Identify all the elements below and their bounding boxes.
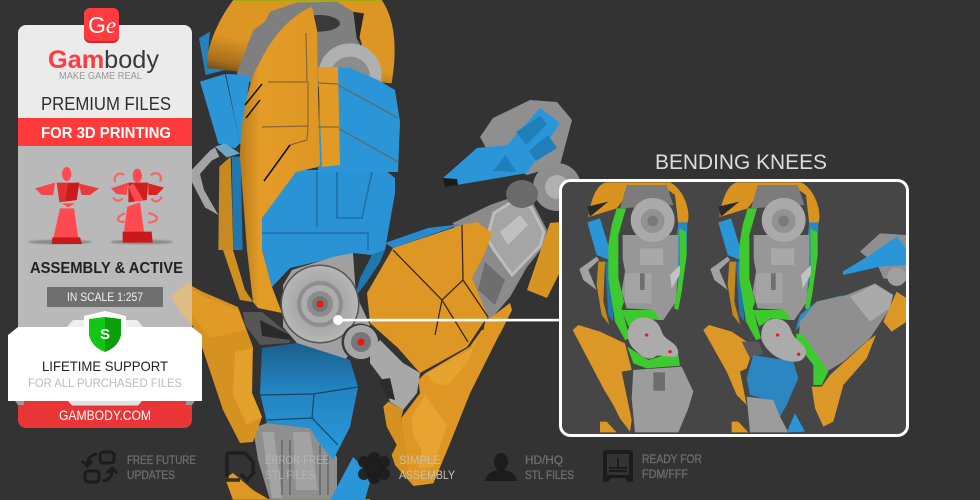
feature strip (82, 450, 702, 484)
lower leg grey mechanics (253, 423, 337, 500)
red band: for 3D printing (18, 118, 192, 146)
feature: ready for fdm/fff: FDM/FFF (642, 469, 688, 481)
upper gears (480, 100, 581, 211)
lifetime support card (8, 311, 202, 406)
left orange leg guard (170, 285, 262, 443)
feature: simple assembly: ASSEMBLY (399, 470, 455, 482)
lower small orange piece (225, 473, 270, 500)
icon: puzzle gear (358, 452, 390, 484)
feature: error-free stl files (227, 453, 329, 482)
icon: file check (227, 453, 255, 480)
tagline: MAKE GAME REAL (59, 71, 142, 82)
upper right blue panels (318, 67, 400, 172)
feature: hd/hq stl files (485, 453, 574, 482)
back orange strip lower (223, 250, 253, 302)
connector line with knob (333, 315, 561, 325)
feature: hd/hq stl files: HD/HQ (525, 455, 563, 467)
sidebar panel (8, 8, 202, 428)
large orange knee armor (367, 222, 492, 373)
bottom red band with url (18, 398, 192, 428)
upper left blue panels and claw (192, 32, 250, 250)
card subtitle: FOR ALL PURCHASED FILES (28, 376, 182, 390)
bottom red band with url: GAMBODY.COM (59, 407, 151, 423)
feature: free future updates (82, 452, 196, 482)
main orange shell (240, 7, 320, 313)
feature: ready for fdm/fff: READY FOR (642, 454, 702, 466)
feature: simple assembly (358, 452, 455, 484)
icon: 3d printer (603, 450, 633, 482)
inset right figure (710, 182, 819, 340)
right statue (110, 169, 173, 244)
right orange guard (383, 303, 512, 486)
shield icon (84, 311, 126, 356)
knee disc (280, 264, 360, 344)
red band: for 3D printing: FOR 3D PRINTING (41, 125, 171, 142)
lower leg blue panel (260, 343, 358, 460)
scale badge (47, 287, 163, 307)
brand name: Gambody (48, 46, 159, 74)
inset left figure (579, 182, 688, 340)
forearm grey mechanism (453, 198, 547, 320)
feature: error-free stl files: ERROR-FREE (265, 455, 329, 467)
feature: hd/hq stl files: STL FILES (525, 470, 574, 482)
back orange arch (205, 0, 395, 83)
shield icon: S (100, 326, 110, 343)
inset panel: bending knees comparison (560, 180, 908, 436)
grey shin strut (370, 340, 420, 410)
panel top light section (18, 25, 192, 118)
icon: update arrows (82, 452, 117, 482)
orange guard seen through panel (171, 282, 192, 325)
icon: iron man bust (485, 453, 517, 481)
orange wrist guard (527, 222, 561, 298)
assembly and active label: ASSEMBLY & ACTIVE (30, 260, 183, 277)
robot leg illustration (170, 0, 581, 500)
back gears (237, 2, 382, 107)
bottom blue piece (330, 457, 370, 500)
feature: free future updates: UPDATES (127, 470, 175, 482)
logo badge: Ge (88, 12, 116, 38)
left statue (28, 167, 99, 244)
inset left knee (573, 325, 632, 432)
logo badge (84, 8, 119, 43)
lower thigh blue panel (262, 170, 395, 287)
premium files heading: PREMIUM FILES (41, 94, 171, 114)
feature: free future updates: FREE FUTURE (127, 455, 196, 467)
statues illustration (28, 167, 173, 244)
feature: ready for fdm/fff (603, 450, 702, 482)
scale badge: IN SCALE 1:257 (67, 290, 143, 304)
feature: error-free stl files: STL FILES (265, 470, 315, 482)
card title: LIFETIME SUPPORT (42, 358, 168, 374)
heading: bending knees: BENDING KNEES (655, 151, 827, 174)
small knee disc (342, 324, 378, 360)
blue foot armor (443, 108, 560, 185)
panel grey section (18, 146, 192, 336)
knee mechanism plate (283, 253, 370, 360)
feature: simple assembly: SIMPLE (399, 455, 441, 467)
